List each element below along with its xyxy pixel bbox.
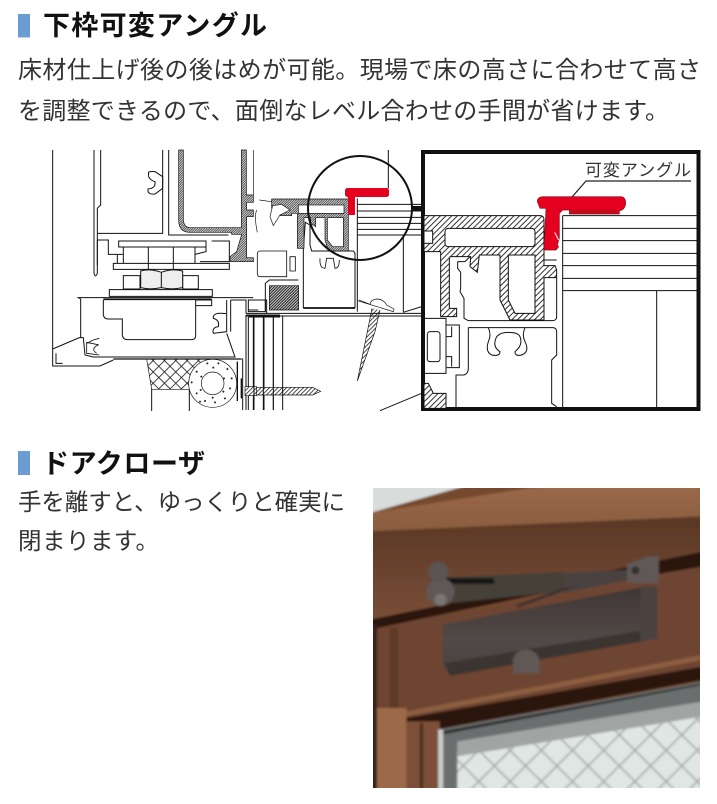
diagram: door sill cross section <box>53 150 280 411</box>
heading: ドアクローザ: ドアクローザ <box>42 449 205 479</box>
hatched sections: sill profile <box>255 199 348 310</box>
icon: horizontal wood screw <box>237 362 321 401</box>
icon: angled wood screw <box>357 299 394 381</box>
photo: door closer <box>373 488 700 788</box>
detail circle <box>308 156 412 260</box>
heading: 下枠可変アングル: 下枠可変アングル <box>43 10 267 41</box>
text block: 下枠可変アングル description <box>18 57 701 125</box>
panel: enlarged detail <box>423 152 698 409</box>
text block: 下枠可変アングル description: 床材仕上げ後の後はめが可能。現場で床の高さに合わせて高さ <box>18 57 701 84</box>
diagram: angle profile and door section <box>240 150 422 411</box>
connector bar <box>412 206 424 211</box>
text block: ドアクローザ description <box>18 489 345 554</box>
text block: 下枠可変アングル description: を調整できるので、面倒なレベル合わせの手間が省けます。 <box>18 98 669 125</box>
arm <box>430 572 564 605</box>
hatched sections: main frame <box>113 150 253 407</box>
hatched profile <box>424 216 557 320</box>
callout: 可変アングル: 可変アングル <box>585 161 691 180</box>
icon: red angle in circle <box>345 188 389 215</box>
text block: ドアクローザ description: 手を離すと、ゆっくりと確実に <box>18 489 345 515</box>
icon: red variable angle <box>537 197 626 250</box>
closer body <box>443 586 657 675</box>
callout: 可変アングル <box>572 161 691 197</box>
text block: ドアクローザ description: 閉まります。 <box>18 528 159 554</box>
